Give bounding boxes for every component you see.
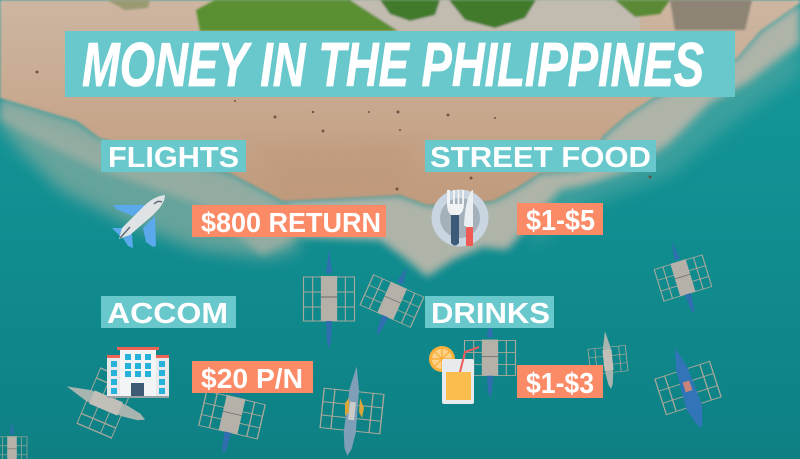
shallow water, right bbox=[530, 30, 800, 245]
section: drinks bbox=[425, 296, 603, 404]
sand bbox=[0, 0, 800, 205]
icon: juice glass with orange slice bbox=[429, 346, 479, 404]
heading: accom: ACCOM bbox=[107, 298, 228, 330]
section: accommodation bbox=[101, 296, 313, 398]
icon: airplane bbox=[112, 195, 165, 248]
heading: street food: STREET FOOD bbox=[430, 142, 651, 174]
section: street food bbox=[425, 140, 656, 246]
section: flights bbox=[101, 140, 386, 248]
icon: plate and cutlery bbox=[432, 190, 488, 246]
boat flags bbox=[345, 398, 364, 418]
price: accom: $20 P/N bbox=[201, 363, 303, 394]
beach people bbox=[36, 70, 652, 190]
centre and right shore foam bbox=[283, 3, 800, 277]
heading: drinks: DRINKS bbox=[431, 298, 550, 330]
price: street food: $1-$5 bbox=[526, 205, 595, 237]
heading: flights: FLIGHTS bbox=[108, 142, 239, 174]
shallow water, left bbox=[0, 105, 300, 258]
price: drinks: $1-$3 bbox=[526, 368, 594, 400]
icon: hotel bbox=[107, 347, 169, 398]
left shore foam bbox=[0, 98, 300, 255]
wet sand bbox=[250, 140, 420, 195]
greenery and rocks at the top bbox=[107, 0, 752, 31]
price: flights: $800 RETURN bbox=[201, 207, 381, 238]
